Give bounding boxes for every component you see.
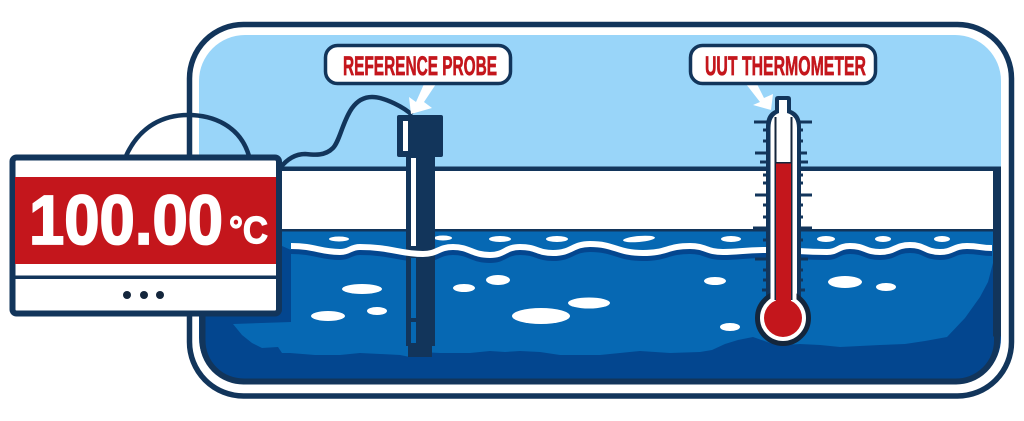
thermometer outer glass xyxy=(766,96,801,300)
menu dots xyxy=(123,291,164,299)
scale ticks xyxy=(753,122,812,290)
meter cable loop xyxy=(126,115,249,156)
surface wave shadow xyxy=(291,249,992,260)
readout divider xyxy=(15,276,276,279)
tank inner wall xyxy=(202,168,997,382)
temperature unit: °C xyxy=(229,210,268,252)
mid-depth liquid xyxy=(233,231,993,357)
label: reference probe xyxy=(326,46,510,114)
tank contents xyxy=(199,35,1001,384)
temperature value: 100.00 xyxy=(29,181,223,259)
readout body xyxy=(12,158,279,314)
pointer arrow xyxy=(409,84,436,114)
UUT thermometer xyxy=(753,96,812,344)
liquid line at top of the bath xyxy=(199,166,1001,171)
red display xyxy=(15,177,276,264)
white band of bath wall xyxy=(199,170,1001,230)
label box xyxy=(690,46,876,84)
probe cable xyxy=(280,97,412,168)
surface wave xyxy=(291,244,992,255)
label box xyxy=(326,46,510,84)
deep liquid xyxy=(199,246,1001,378)
probe head xyxy=(397,115,443,157)
label text: UUT THERMOMETER xyxy=(705,51,866,81)
bubbles xyxy=(311,235,950,331)
pointer arrow xyxy=(746,84,773,110)
probe stem xyxy=(406,156,435,346)
inner tube lines xyxy=(776,117,792,300)
panel: bath tank xyxy=(190,24,1012,396)
panel: digital readout xyxy=(12,158,279,314)
label text: REFERENCE PROBE xyxy=(343,51,497,81)
label: UUT thermometer xyxy=(690,46,876,110)
reference probe xyxy=(397,115,443,357)
thermometer bulb xyxy=(758,292,808,344)
air above the liquid xyxy=(199,35,1001,170)
tank outer wall xyxy=(190,24,1012,396)
mercury column xyxy=(776,163,791,308)
